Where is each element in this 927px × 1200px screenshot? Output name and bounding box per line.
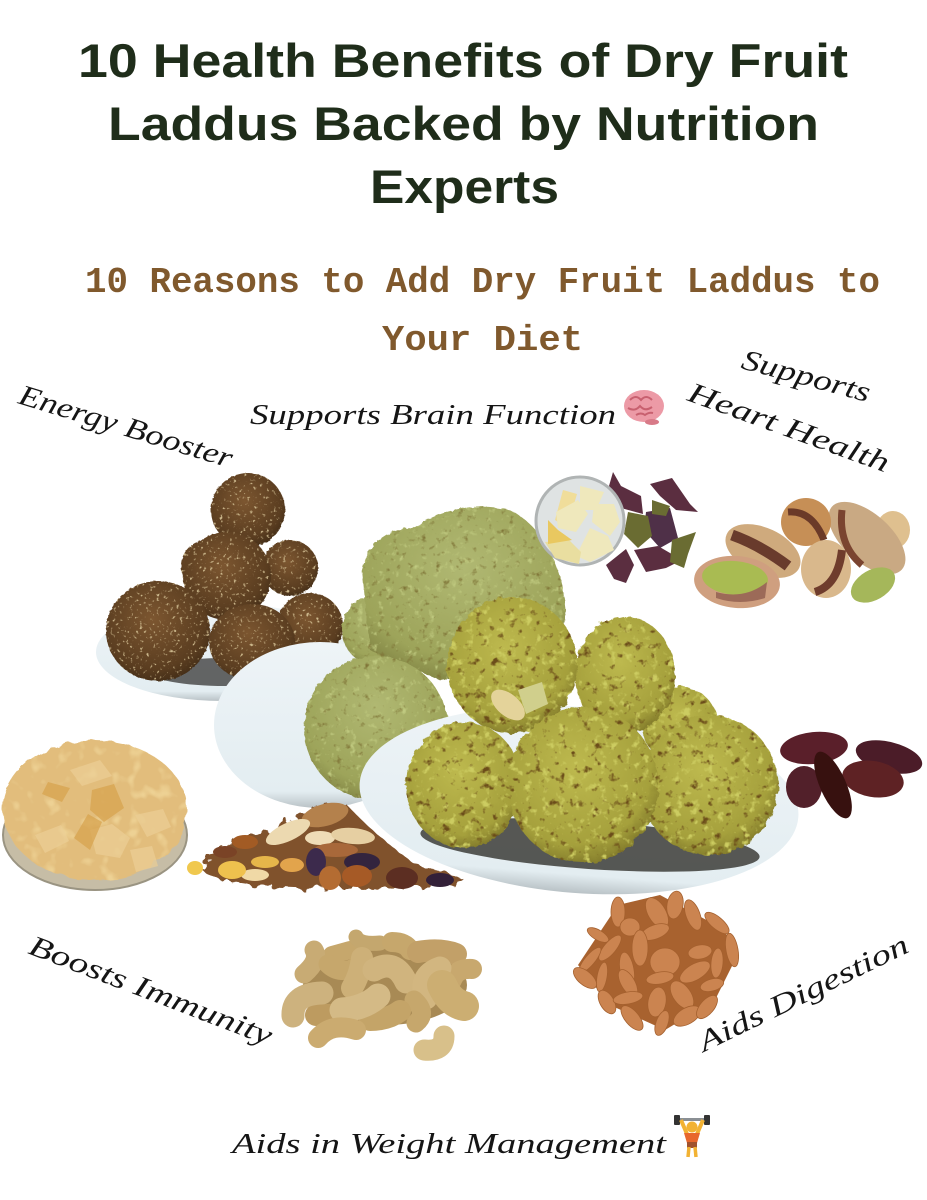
- food: back plate with green laddus: [214, 507, 566, 808]
- food: mixed nuts: [187, 798, 465, 890]
- label: aids digestion: Aids Digestion: [691, 929, 914, 1059]
- food: dates: [779, 729, 926, 823]
- label: supports heart health: Supports: [738, 344, 874, 409]
- subtitle: Your Diet: [382, 320, 583, 361]
- food: brown laddus on plate: [96, 473, 348, 701]
- food: almonds: [570, 890, 741, 1037]
- title: Experts: [370, 160, 559, 213]
- food: pistachios: [692, 489, 918, 612]
- label: supports heart health: Heart Health: [682, 376, 894, 479]
- subtitle: [85, 262, 880, 361]
- label: supports heart health: [682, 344, 894, 479]
- title: Laddus Backed by Nutrition: [108, 97, 819, 150]
- label: energy booster: Energy Booster: [14, 379, 237, 475]
- title: 10 Health Benefits of Dry Fruit: [78, 34, 848, 87]
- subtitle: 10 Reasons to Add Dry Fruit Laddus to: [85, 262, 880, 303]
- food: sugar crystals: [3, 740, 187, 890]
- icon: brain: [624, 390, 664, 425]
- food: bowl with seeds and dark flowers: [536, 472, 698, 583]
- label: aids in weight management: Aids in Weight Management: [229, 1128, 667, 1160]
- label: supports brain function: Supports Brain Function: [250, 399, 616, 431]
- label: boosts immunity: Boosts Immunity: [24, 930, 277, 1052]
- food: front plate with green laddus: [352, 597, 806, 910]
- icon: weightlifter: [674, 1115, 710, 1157]
- food: cashews: [293, 937, 472, 1050]
- title: [78, 34, 848, 213]
